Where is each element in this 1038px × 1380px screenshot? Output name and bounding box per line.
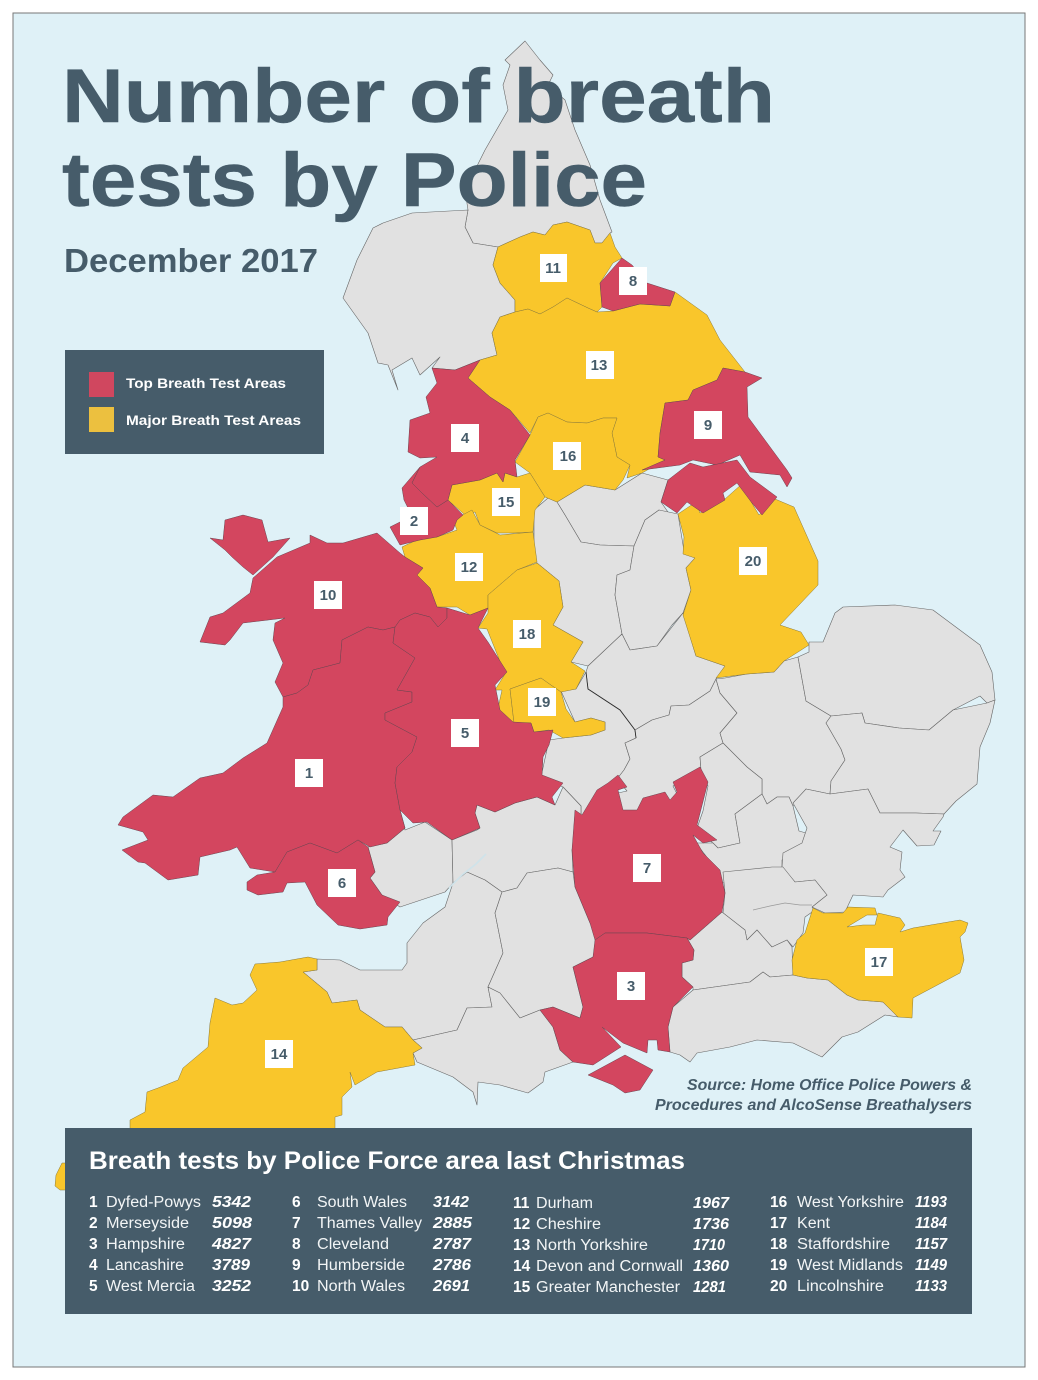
legend swatch: top areas <box>89 372 114 397</box>
table column 3: 1360 <box>693 1258 729 1275</box>
area 6: South Wales <box>247 840 400 929</box>
area: Suffolk <box>826 700 995 814</box>
table column 4: Staffordshire <box>797 1236 890 1253</box>
table column 2: 8 <box>292 1236 301 1253</box>
label 16: 16 <box>560 448 576 465</box>
table column 1: West Mercia <box>106 1278 195 1295</box>
table column 3: 14 <box>513 1258 531 1275</box>
table column 4 <box>770 1194 948 1295</box>
area: Leicestershire <box>586 613 725 730</box>
table column 3: 1967 <box>693 1195 730 1212</box>
table column 3 <box>513 1195 730 1296</box>
table column 3: 1281 <box>693 1279 726 1296</box>
table column 1: 4827 <box>211 1236 253 1253</box>
table column 2: 3142 <box>433 1194 469 1211</box>
area: Gwent <box>368 810 453 907</box>
legend <box>65 350 324 454</box>
area: Warwickshire <box>541 672 636 818</box>
table column 4: West Midlands <box>797 1257 903 1274</box>
label 19: 19 <box>534 694 550 711</box>
table column 1: Dyfed-Powys <box>106 1194 201 1211</box>
label 20 <box>739 547 767 575</box>
label 10: 10 <box>320 587 336 604</box>
area 2: Merseyside <box>390 467 463 545</box>
source note: Source: Home Office Police Powers & <box>687 1077 972 1094</box>
table column 2: 10 <box>292 1278 309 1295</box>
table column 4: Kent <box>797 1215 831 1232</box>
area 4: Lancashire <box>408 360 530 507</box>
area: Cumbria <box>343 210 515 390</box>
area: Avon and Somerset <box>303 872 503 1040</box>
table column 3: Greater Manchester <box>536 1279 680 1296</box>
source note <box>655 1077 972 1114</box>
area 17: Kent <box>792 907 968 1018</box>
label 16 <box>553 442 581 470</box>
area 7: Thames Valley <box>572 767 725 940</box>
legend swatch: major areas <box>89 407 114 432</box>
area: Cambridgeshire <box>716 657 845 806</box>
table column 2 <box>292 1194 473 1295</box>
table column 4: 17 <box>770 1215 787 1232</box>
label 4: 4 <box>461 430 470 447</box>
label 6: 6 <box>338 875 346 892</box>
label 7 <box>633 854 661 882</box>
table column 1: Merseyside <box>106 1215 189 1232</box>
area: Gloucestershire <box>452 787 581 892</box>
table column 1: 3 <box>89 1236 98 1253</box>
label 9 <box>694 411 722 439</box>
label 1 <box>295 759 323 787</box>
area 14: Cornwall tip <box>55 1163 70 1190</box>
table column 4: 1133 <box>915 1278 947 1295</box>
area: Sussex <box>668 972 898 1062</box>
table column 2: Humberside <box>317 1257 405 1274</box>
label 17 <box>865 948 893 976</box>
table column 1: 5098 <box>212 1215 252 1232</box>
table column 2: South Wales <box>317 1194 407 1211</box>
area: Wiltshire <box>488 868 600 1018</box>
table column 2: Cleveland <box>317 1236 389 1253</box>
area 3: Hampshire <box>540 933 694 1093</box>
label 6 <box>328 869 356 897</box>
table column 4: 18 <box>770 1236 788 1253</box>
table column 1: 3252 <box>212 1278 251 1295</box>
table column 3: 12 <box>513 1216 530 1233</box>
label 18 <box>513 620 541 648</box>
table column 1: 3789 <box>212 1257 250 1274</box>
table column 1: 4 <box>89 1257 98 1274</box>
area 5: West Mercia <box>385 608 563 840</box>
table column 3: 1736 <box>693 1216 729 1233</box>
table column 2: 2786 <box>432 1257 471 1274</box>
label 4 <box>451 424 479 452</box>
area 9: Humberside <box>642 368 792 515</box>
area 13: North Yorkshire <box>468 292 745 478</box>
area: Hertfordshire <box>696 794 806 883</box>
area 12: Cheshire <box>402 510 537 615</box>
area: Norfolk <box>798 605 995 730</box>
subtitle: December 2017 <box>64 242 318 279</box>
label 15: 15 <box>498 494 514 511</box>
map number labels <box>265 254 893 1068</box>
table column 2: Thames Valley <box>317 1215 422 1232</box>
table column 4: 1193 <box>915 1194 947 1211</box>
table column 4: 1157 <box>915 1236 948 1253</box>
label 11 <box>540 254 567 282</box>
area: Metropolitan London <box>723 867 827 947</box>
table column 4: 1149 <box>915 1257 947 1274</box>
table column 3: 13 <box>513 1237 531 1254</box>
label 11: 11 <box>545 260 561 277</box>
table column 2: 2691 <box>432 1278 470 1295</box>
label 14: 14 <box>271 1046 288 1063</box>
table column 1: 5342 <box>212 1194 251 1211</box>
table column 3: 1710 <box>693 1237 725 1254</box>
label 3: 3 <box>627 978 635 995</box>
table column 1: Lancashire <box>106 1257 184 1274</box>
label 12 <box>455 553 483 581</box>
area 14: Devon and Cornwall <box>130 957 422 1140</box>
label 12: 12 <box>461 559 477 576</box>
label 18: 18 <box>519 626 535 643</box>
label 10 <box>314 581 342 609</box>
label 20: 20 <box>745 553 761 570</box>
area: Surrey <box>682 912 793 990</box>
area 15: Greater Manchester <box>448 473 545 533</box>
label 5 <box>451 719 479 747</box>
area: Dorset <box>413 987 573 1105</box>
legend label: major areas: Major Breath Test Areas <box>126 412 301 428</box>
label 8: 8 <box>629 273 637 290</box>
table column 3: Durham <box>536 1195 593 1212</box>
table column 2: North Wales <box>317 1278 405 1295</box>
table heading: Breath tests by Police Force area last Christmas <box>89 1147 685 1175</box>
table panel <box>65 1128 972 1314</box>
table column 3: Cheshire <box>536 1216 601 1233</box>
table column 2: 6 <box>292 1194 301 1211</box>
area 1: Dyfed-Powys <box>118 627 417 880</box>
table column 3: North Yorkshire <box>536 1237 648 1254</box>
title: Number of breath <box>62 54 775 139</box>
label 2 <box>400 507 428 535</box>
label 9: 9 <box>704 417 712 434</box>
table column 3: Devon and Cornwall <box>536 1258 683 1275</box>
area: South Yorkshire <box>557 473 670 546</box>
area 16: West Yorkshire <box>515 413 630 502</box>
map of England and Wales police force areas <box>55 41 995 1190</box>
title: tests by Police <box>62 138 647 223</box>
area: Derbyshire <box>534 498 634 666</box>
table column 1: 5 <box>89 1278 98 1295</box>
label 13 <box>586 351 614 379</box>
source note: Procedures and AlcoSense Breathalysers <box>655 1097 972 1114</box>
label 14 <box>265 1040 293 1068</box>
area 18: Staffordshire <box>478 563 585 723</box>
table column 4: 19 <box>770 1257 788 1274</box>
label 5: 5 <box>461 725 469 742</box>
label 13: 13 <box>591 357 607 374</box>
table column 1 <box>89 1194 253 1295</box>
area 10: North Wales <box>200 515 447 697</box>
label 2: 2 <box>410 513 418 530</box>
table column 4: 16 <box>770 1194 788 1211</box>
label 1: 1 <box>305 765 313 782</box>
table column 1: 2 <box>89 1215 98 1232</box>
area: Northamptonshire <box>617 679 737 814</box>
area: Nottinghamshire <box>615 510 695 650</box>
label 3 <box>617 972 645 1000</box>
area: Northumbria <box>465 41 612 247</box>
table column 4: Lincolnshire <box>797 1278 884 1295</box>
table column 1: 1 <box>89 1194 98 1211</box>
table column 4: West Yorkshire <box>797 1194 904 1211</box>
area: Bedfordshire <box>696 743 762 848</box>
table column 2: 9 <box>292 1257 301 1274</box>
label 19 <box>528 688 556 716</box>
label 7: 7 <box>643 860 651 877</box>
label 17: 17 <box>871 954 887 971</box>
area 8: Cleveland <box>600 258 675 311</box>
table column 2: 7 <box>292 1215 301 1232</box>
label 8 <box>619 267 647 295</box>
table column 2: 2787 <box>432 1236 473 1253</box>
area 11: Durham <box>493 222 622 314</box>
area 19: West Midlands <box>510 678 605 738</box>
legend label: top areas: Top Breath Test Areas <box>126 375 286 391</box>
table column 3: 11 <box>513 1195 530 1212</box>
area: Essex <box>782 789 944 913</box>
title <box>62 54 775 223</box>
table column 1: Hampshire <box>106 1236 185 1253</box>
table column 3: 15 <box>513 1279 531 1296</box>
area 20: Lincolnshire <box>678 483 818 678</box>
label 15 <box>492 488 520 516</box>
table column 4: 1184 <box>915 1215 947 1232</box>
table column 2: 2885 <box>432 1215 472 1232</box>
table column 4: 20 <box>770 1278 787 1295</box>
